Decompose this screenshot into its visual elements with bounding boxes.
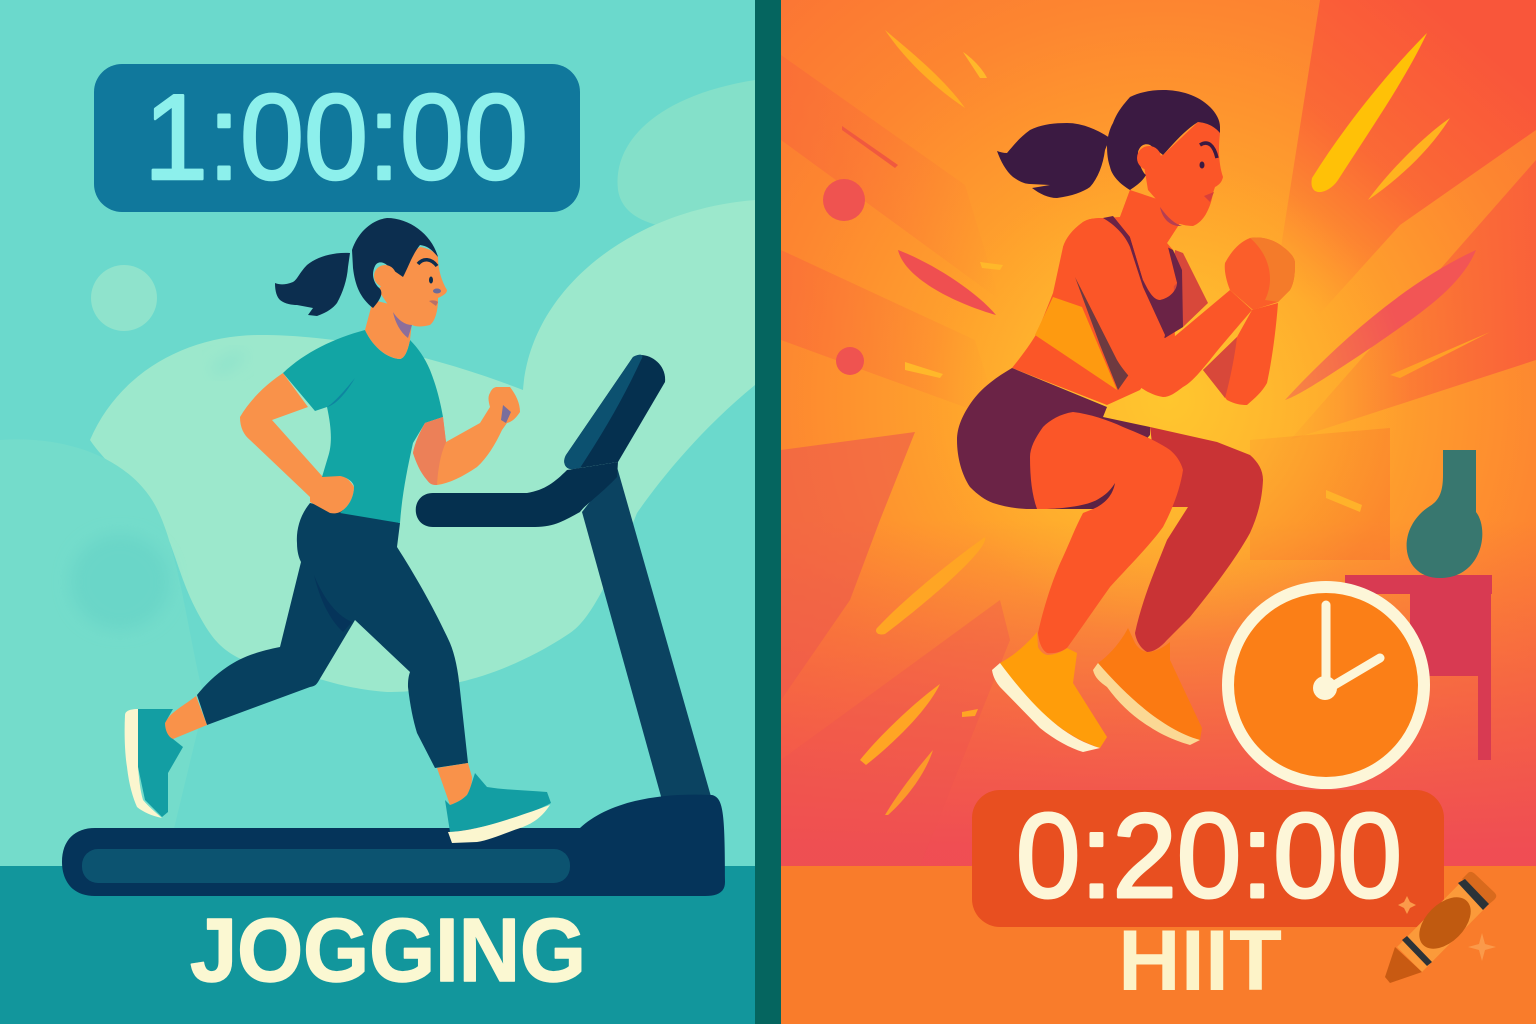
- hair: [352, 218, 438, 308]
- ear: [374, 265, 396, 287]
- central glow: [930, 160, 1410, 640]
- front arm: [413, 387, 520, 485]
- sparkles: [1398, 896, 1416, 914]
- treadmill: [62, 355, 725, 896]
- face: [378, 247, 447, 326]
- panel: HIIT: [781, 0, 1536, 1024]
- back ankle: [165, 696, 207, 739]
- side shadow: [1075, 277, 1130, 390]
- back shoe: [138, 709, 183, 817]
- midriff band: [1035, 297, 1117, 390]
- hands: [1225, 237, 1295, 310]
- clock: [1228, 587, 1424, 783]
- front leg: [1030, 412, 1183, 653]
- back arm: [240, 373, 354, 513]
- divider: [755, 0, 781, 1024]
- hair: [1107, 90, 1220, 190]
- timer: 1:00:00: 1:00:00: [144, 69, 528, 205]
- neck: [365, 300, 412, 359]
- panel: jogging: [0, 0, 756, 1024]
- front ankle: [437, 763, 472, 805]
- shorts: [957, 368, 1150, 509]
- ponytail: [275, 253, 350, 316]
- athlete: [957, 90, 1295, 752]
- bra: [1103, 216, 1183, 338]
- timer: 0:20:00: 0:20:00: [1016, 789, 1402, 923]
- floor: [0, 866, 756, 1024]
- icon: crayon: [1385, 872, 1496, 983]
- front shoe: [445, 773, 551, 832]
- ponytail: [997, 123, 1110, 198]
- background shards: [781, 0, 1536, 866]
- back leg: [1135, 427, 1263, 652]
- floor: [781, 866, 1536, 1024]
- ear: [1137, 146, 1161, 170]
- label: HIIT: HIIT: [1118, 913, 1282, 1009]
- upper arm and forearm: [1063, 218, 1252, 397]
- front shoe: [1000, 632, 1107, 748]
- shirt: [283, 330, 443, 523]
- second forearm: [1203, 303, 1278, 405]
- torso: [1012, 190, 1180, 405]
- eyebrow and facial details: [418, 260, 437, 266]
- right chest shadow: [1165, 250, 1208, 338]
- streaks: [823, 30, 1490, 815]
- eyebrow and facial details: [1200, 143, 1217, 158]
- background blobs: [0, 80, 755, 866]
- back shoe: [1098, 628, 1202, 740]
- table and kettlebell: [1345, 450, 1492, 760]
- label: JOGGING: JOGGING: [190, 901, 586, 1001]
- face: [1143, 122, 1223, 226]
- back leg and front leg: [197, 503, 468, 768]
- neck: [1120, 190, 1180, 300]
- jogger: [125, 218, 551, 843]
